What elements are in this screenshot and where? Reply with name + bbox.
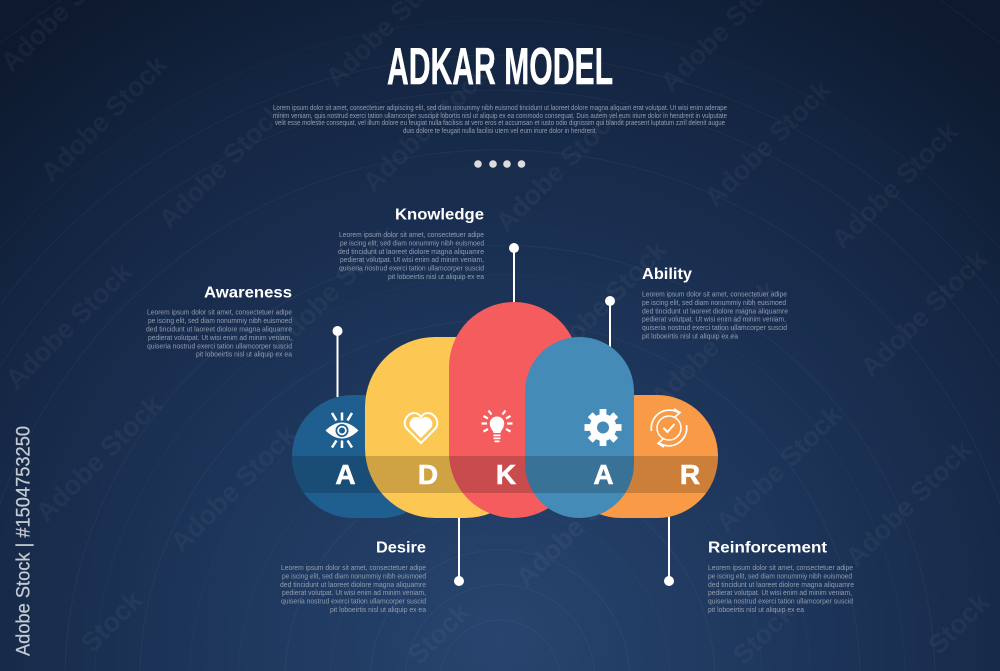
block: knowledge: pe iscing elit, sed diam nonummiy nibh euismoed xyxy=(340,238,484,247)
block: awareness: Awareness xyxy=(204,284,292,302)
watermarks: Stock xyxy=(75,584,149,658)
block: ability xyxy=(642,266,788,340)
block: knowledge: pit loboeirtis nisl ut aliquip ex ea xyxy=(388,272,485,281)
watermarks: Stock xyxy=(402,596,476,670)
block: ability: Ability xyxy=(642,266,692,283)
block: desire: pit loboeirtis nisl ut aliquip ex ea xyxy=(330,605,427,614)
watermarks: Adobe Stock xyxy=(699,74,837,213)
block: knowledge xyxy=(338,206,485,281)
intro paragraph: minim veniam, quis nostrud exerci tation ullamcorper suscipit lobortis nisl ut aliquip ex ea commodo consequat. Duis autem vel eum iriure dolor in hendrerit in vulputate xyxy=(273,111,727,120)
watermarks: Adobe Stock xyxy=(855,244,993,383)
watermarks: Adobe Stock xyxy=(30,389,168,528)
shape: desire xyxy=(365,337,535,518)
block: knowledge: pedierat volutpat. Ut wisi enim ad minim veniam, xyxy=(340,255,484,264)
side credit: Adobe Stock | #1504753250 xyxy=(14,426,34,656)
shape: reinforcement xyxy=(560,395,718,518)
watermarks: Adobe Stock xyxy=(710,399,848,538)
connector: ability xyxy=(605,296,615,351)
letters: D xyxy=(418,459,438,490)
letter band xyxy=(292,456,718,493)
connector: desire xyxy=(454,516,464,586)
icon: heart xyxy=(405,413,437,443)
letters: R xyxy=(680,459,700,490)
watermarks: Adobe Stock xyxy=(165,419,303,558)
watermarks: Adobe Stock xyxy=(153,96,291,235)
block: reinforcement: quiseria nostrud exerci tation ullamcorper suscid xyxy=(708,597,853,606)
block: awareness: pedierat volutpat. Ut wisi enim ad minim veniam, xyxy=(148,333,292,342)
block: ability: quiseria nostrud exerci tation ullamcorper suscid xyxy=(642,323,787,332)
block: reinforcement: Reinforcement xyxy=(708,540,827,556)
block: knowledge: ded tincidunt ut laoreet diolore magna aliquamre xyxy=(338,247,484,256)
block: desire: pe iscing elit, sed diam nonummiy nibh euismoed xyxy=(282,571,426,580)
shape: knowledge xyxy=(449,302,579,518)
watermarks: Adobe Stock xyxy=(510,454,648,593)
watermarks: Stock xyxy=(727,596,801,670)
block: knowledge: Knowledge xyxy=(395,206,484,224)
watermarks: Adobe Stock xyxy=(265,219,403,358)
block: desire: Leorem ipsum dolor sit amet, consectetuer adipe xyxy=(281,563,426,572)
block: awareness: ded tincidunt ut laoreet diolore magna aliquamre xyxy=(146,324,292,334)
watermarks: Adobe Stock xyxy=(357,59,495,198)
block: knowledge: quiseria nostrud exerci tation ullamcorper suscid xyxy=(339,264,484,273)
ADKAR shapes xyxy=(292,302,718,518)
block: desire: pedierat volutpat. Ut wisi enim ad minim veniam, xyxy=(282,588,426,597)
block: ability: Leorem ipsum dolor sit amet, consectetuer adipe xyxy=(642,290,787,298)
connector: knowledge xyxy=(509,243,519,304)
letters xyxy=(335,459,700,490)
watermarks: Adobe Stock xyxy=(840,434,978,573)
block: awareness xyxy=(146,284,293,359)
block: ability: ded tincidunt ut laoreet diolore magna aliquamre xyxy=(642,306,788,315)
icon: gear xyxy=(584,409,622,446)
watermarks: Adobe Stock xyxy=(535,234,673,373)
pagination dots xyxy=(474,160,525,168)
intro paragraph xyxy=(273,103,727,135)
watermarks: Adobe Stock xyxy=(826,116,964,255)
connector: awareness xyxy=(332,326,342,397)
block: reinforcement: pit loboeirtis nisl ut aliquip ex ea xyxy=(708,605,805,614)
block: reinforcement: ded tincidunt ut laoreet diolore magna aliquamre xyxy=(708,580,854,589)
watermarks: Adobe Stock xyxy=(35,49,173,188)
block: ability: pit loboeirtis nisl ut aliquip ex ea xyxy=(642,332,739,340)
block: ability: pe iscing elit, sed diam nonummiy nibh euismoed xyxy=(642,298,786,307)
block: awareness: Leorem ipsum dolor sit amet, consectetuer adipe xyxy=(147,308,292,316)
icon: cycle check xyxy=(651,409,687,447)
block: reinforcement xyxy=(708,540,854,614)
block: ability: pedierat volutpat. Ut wisi enim ad minim veniam, xyxy=(642,315,786,324)
watermarks: Adobe Stock xyxy=(0,256,138,395)
letters: A xyxy=(335,459,356,490)
block: awareness: pit loboeirtis nisl ut aliquip ex ea xyxy=(196,350,293,359)
block: reinforcement: Leorem ipsum dolor sit amet, consectetuer adipe xyxy=(708,563,853,572)
letters: K xyxy=(496,459,516,490)
block: knowledge: Leorem ipsum dolor sit amet, consectetuer adipe xyxy=(339,230,484,239)
block: reinforcement: pe iscing elit, sed diam nonummiy nibh euismoed xyxy=(708,571,852,580)
watermarks: Adobe Stock xyxy=(490,99,628,238)
connector: reinforcement xyxy=(664,516,674,586)
block: reinforcement: pedierat volutpat. Ut wisi enim ad minim veniam, xyxy=(708,588,852,597)
shape: ability xyxy=(525,337,634,518)
icon: eye xyxy=(326,412,358,448)
intro paragraph: duis dolore te feugait nulla facilisi utem vel eum iriure dolor in hendrerit. xyxy=(403,126,597,135)
block: desire xyxy=(280,540,427,614)
block: desire: ded tincidunt ut laoreet diolore magna aliquamre xyxy=(280,580,426,589)
icon: bulb xyxy=(482,410,512,442)
watermarks: Stock xyxy=(922,586,996,660)
letters: A xyxy=(593,459,614,490)
title: ADKAR MODEL xyxy=(387,38,613,96)
watermarks: Adobe Stock xyxy=(645,274,783,413)
block: desire: quiseria nostrud exerci tation ullamcorper suscid xyxy=(281,597,426,606)
block: awareness: quiseria nostrud exerci tation ullamcorper suscid xyxy=(147,341,292,350)
block: desire: Desire xyxy=(376,540,426,556)
intro paragraph: Lorem ipsum dolor sit amet, consectetuer adipiscing elit, sed diam nonummy nibh euismod tincidunt ut laoreet dolore magna aliquam erat volutpat. Ut wisi enim aderape xyxy=(273,103,727,112)
shape: awareness xyxy=(292,395,442,518)
block: awareness: pe iscing elit, sed diam nonummiy nibh euismoed xyxy=(148,316,292,325)
intro paragraph: velit esse molestie consequat, vel illum dolore eu feugiat nulla facilisis at vero eros et accumsan et iusto odio dignissim qui blandit praesent luptatum zzril delenit augue xyxy=(275,118,725,127)
